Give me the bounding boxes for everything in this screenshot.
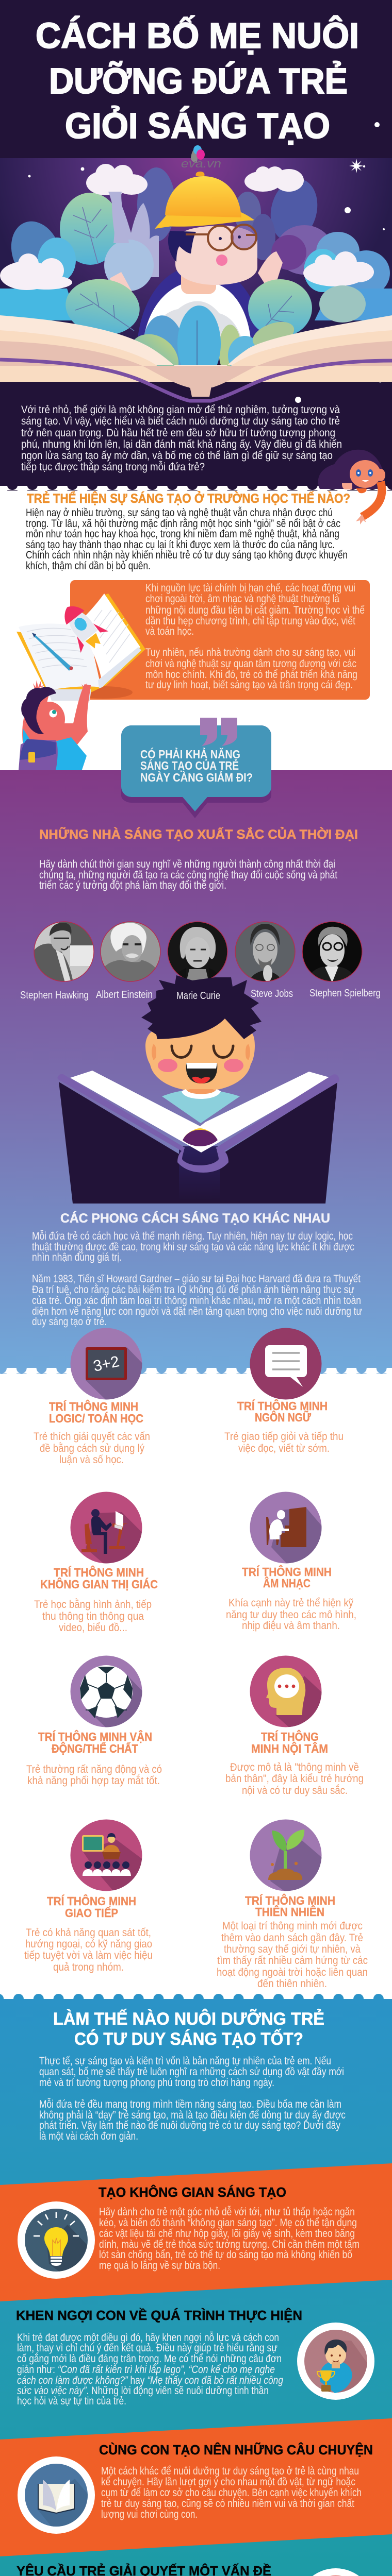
heading: make stories: CÙNG CON TẠO NÊN NHỮNG CÂU CHUYỆN — [99, 2442, 373, 2458]
panel: stories band — [0, 2418, 392, 2556]
portrait names — [20, 988, 381, 1002]
card: music intelligence — [226, 1565, 356, 1632]
card: music intelligence: ÂM NHẠC — [263, 1576, 311, 1590]
card: inner intelligence: bản thân", đây là kiểu trẻ hướng — [225, 1772, 364, 1785]
card: language intelligence: Trẻ giao tiếp giỏi và tiếp thu — [224, 1430, 344, 1443]
card: nature intelligence: thường say thế giới tự nhiên, và — [224, 1943, 361, 1955]
text block: school paragraph — [26, 507, 348, 572]
hands — [110, 251, 283, 312]
portrait names: Stephen Hawking — [20, 990, 89, 1001]
text block: creative styles — [32, 1230, 362, 1328]
logo: eva.vn — [181, 145, 221, 170]
card: inner intelligence: Được mô tả là "thông minh về — [230, 1761, 359, 1773]
heading: outstanding creators: NHỮNG NHÀ SÁNG TẠO XUẤT SẮC CỦA THỜI ĐẠI — [39, 826, 358, 842]
card: movement physical intelligence: TRÍ THÔNG MINH VẬN — [38, 1730, 152, 1743]
creative space text: mẹ quá lo lắng về sự bừa bộn. — [99, 2260, 220, 2272]
illustration: boy holding up book with rocket and pencil — [17, 594, 145, 771]
text block: introduction: ngọn lửa sáng tạo ấy mờ dần, và bố mẹ có thể làm gì để giữ sự sáng tạo — [21, 450, 333, 462]
text block: introduction: trở nên quan trọng. Dù hầu hết trẻ em đều sở hữu trí tưởng tượng phong — [21, 427, 335, 439]
title: CÁCH BỐ MẸ NUÔI — [36, 15, 359, 56]
text block: school paragraph: Hiện nay ở nhiều trường, sự sáng tạo và nghệ thuật vẫn chưa nhận được chú — [26, 507, 333, 519]
callout text: dần thu hẹp chương trình, chỉ tập trung vào đọc, viết — [145, 615, 355, 627]
card: communication intelligence: quả trong nhóm. — [53, 1961, 124, 1973]
text block: school paragraph: môn như toán học hay khoa học, trong khi niềm đam mê nghệ thuật, khả năng — [26, 528, 339, 540]
text block: introduction: tiếp tục được thắp sáng trong mỗi đứa trẻ? — [21, 461, 205, 473]
card: visual spatial intelligence — [34, 1565, 158, 1634]
shirt — [162, 1089, 240, 1123]
icon: child with trophy — [297, 2323, 377, 2402]
text block: how to nurture: mẻ và trí tưởng tượng phong phú trong trò chơi hàng ngày. — [39, 2077, 274, 2089]
card: communication intelligence: TRÍ THÔNG MINH — [47, 1894, 136, 1908]
portrait: Stephen Spielberg — [301, 921, 363, 982]
card: nature intelligence — [217, 1893, 368, 1990]
text block: school paragraph: khích, thậm chí dần bị bỏ quên. — [26, 560, 151, 572]
card: movement physical intelligence: ĐỘNG/THỂ CHẤT — [52, 1741, 138, 1755]
text block: praise the process: giản như: “Con đã rất kiên trì khi lắp lego”, “Con kể cho mẹ nghe — [17, 2364, 275, 2376]
question text: NGÀY CÀNG GIẢM ĐI? — [140, 770, 253, 784]
card: communication intelligence: tiếp tuyệt vời và làm việc hiệu — [24, 1949, 153, 1961]
panel: dark hero background — [0, 0, 392, 491]
clouds — [0, 164, 374, 290]
portrait: Marie Curie — [167, 921, 228, 982]
back leaves — [0, 167, 392, 320]
card: communication intelligence: Trẻ có khả năng quan sát tốt, — [26, 1926, 151, 1939]
stories text — [101, 2465, 362, 2520]
card: communication intelligence: hướng ngoại, có kỹ năng giao — [25, 1938, 152, 1950]
icon: teacher and audience — [70, 1820, 142, 1891]
text block: praise the process: học hỏi và sự tự tin của trẻ. — [17, 2395, 126, 2407]
text block: creators intro: chúng ta, những người đã tạo ra các công nghệ thay đổi cuộc sống và phát — [39, 869, 337, 881]
icon: football — [70, 1656, 142, 1727]
face — [145, 1018, 255, 1091]
text block: how to nurture — [39, 2055, 346, 2142]
text block: introduction: phú, nhưng khi lớn lên, lại dần đánh mất khả năng ấy. Vậy điều gì đã khiến — [21, 438, 342, 450]
text block: praise the process: sức vào việc này”. Những lời động viên sẽ nuôi dưỡng tinh thần — [17, 2385, 269, 2397]
card: visual spatial intelligence: Trẻ học bằng hình ảnh, tiếp — [34, 1598, 152, 1611]
text block: introduction: Với trẻ nhỏ, thế giới là một không gian mở để thử nghiệm, tưởng tượng và — [21, 404, 340, 416]
portrait names: Albert Einstein — [96, 989, 153, 1001]
card: inner intelligence — [225, 1730, 364, 1797]
illustration: boy reading book — [57, 975, 339, 1204]
title: GIỎI SÁNG TẠO — [65, 105, 330, 146]
callout text: chơi ngoài trời, âm nhạc và nghệ thuật thường là — [145, 593, 339, 605]
card: visual spatial intelligence: KHÔNG GIAN THỊ GIÁC — [40, 1577, 158, 1591]
stars — [28, 122, 385, 403]
card: inner intelligence: MINH NỘI TÂM — [251, 1741, 328, 1755]
question text — [140, 747, 253, 784]
card: visual spatial intelligence: video, biểu đồ... — [59, 1621, 127, 1634]
card: inner intelligence: TRÍ THÔNG — [261, 1730, 319, 1743]
card: music intelligence: Khía cạnh này trẻ thể hiện kỹ — [228, 1597, 353, 1609]
portrait: Albert Einstein — [100, 921, 161, 982]
pages — [70, 1071, 331, 1153]
card: music intelligence: TRÍ THÔNG MINH — [242, 1565, 332, 1579]
card: movement physical intelligence: Trẻ thường rất năng động và có — [26, 1763, 162, 1775]
card: logic maths intelligence: LOGIC/ TOÁN HỌC — [49, 1411, 143, 1425]
text block: how to nurture: là một vài cách đơn giản. — [39, 2130, 138, 2142]
card: logic maths intelligence: Trẻ thích giải quyết các vấn — [34, 1430, 150, 1443]
text block: praise the process: làm, thay vì chỉ chú ý đến kết quả. Điều này giúp trẻ hiểu rằng sự — [17, 2342, 277, 2354]
icon: document with pointing hand — [313, 2568, 359, 2576]
text block: school paragraph: sáng tạo hay thành thạo nhạc cụ lại ít khi được xem là thước đo của năng lực. — [26, 539, 335, 551]
text block: creators intro — [39, 858, 337, 891]
card: nature intelligence: TRÍ THÔNG MINH — [245, 1893, 335, 1907]
callout text: tư duy linh hoạt, biết sáng tạo và trân trọng cái đẹp. — [145, 679, 353, 691]
card: language intelligence: TRÍ THÔNG MINH — [237, 1399, 328, 1413]
portrait names: Stephen Spielberg — [309, 988, 381, 999]
portrait names: Marie Curie — [176, 990, 220, 1002]
card: visual spatial intelligence: thu thông tin thông qua — [42, 1610, 144, 1622]
title — [36, 15, 359, 146]
card: communication intelligence: GIAO TIẾP — [65, 1906, 118, 1920]
card: nature intelligence: THIÊN NHIÊN — [255, 1905, 324, 1919]
icon: person at piano — [250, 1492, 322, 1563]
portrait: Stephen Hawking — [33, 921, 96, 982]
stories text: lượng vui chơi cùng con. — [101, 2509, 198, 2520]
portrait names: Steve Jobs — [251, 988, 293, 999]
card: nature intelligence: tìm thấy rất nhiều cảm hứng từ các — [217, 1954, 368, 1967]
panel: purple gradient section — [0, 770, 392, 1374]
heading: how to nurture: CÓ TƯ DUY SÁNG TẠO TỐT? — [74, 2029, 303, 2049]
open book — [0, 315, 392, 401]
quote mark — [200, 718, 237, 746]
question text: SÁNG TẠO CỦA TRẺ — [140, 758, 239, 772]
heading: creative space: TẠO KHÔNG GIAN SÁNG TẠO — [99, 2184, 286, 2200]
card: language intelligence: NGÔN NGỮ — [255, 1410, 312, 1424]
panel: blue gradient section — [0, 1993, 392, 2576]
callout text: và toán học. — [145, 625, 194, 637]
text block: how to nurture: Thực tế, sự sáng tạo và kiên trì vốn là bản năng tự nhiên của trẻ em. Nếu — [39, 2055, 331, 2067]
heading: praise the process: KHEN NGỢI CON VỀ QUÁ TRÌNH THỰC HIỆN — [16, 2308, 302, 2323]
book cover — [59, 1082, 337, 1204]
text block: praise the process: cố gắng mới là điều đáng trân trọng. Mẹ có thể nói những câu đơn — [17, 2353, 282, 2365]
card: logic maths intelligence: đề bằng cách sử dụng lý — [40, 1442, 144, 1454]
icon: person at computer desk — [70, 1492, 142, 1563]
card: language intelligence: việc đọc, viết từ sớm. — [238, 1442, 330, 1454]
card: movement physical intelligence — [26, 1730, 162, 1787]
text block: praise the process — [17, 2332, 283, 2407]
callout text — [145, 582, 365, 691]
portrait: Steve Jobs — [234, 921, 296, 982]
heading: how to nurture: LÀM THẾ NÀO NUÔI DƯỠNG TRẺ — [53, 2009, 324, 2029]
text block: creative styles: duy sáng tạo ở trẻ. — [32, 1316, 107, 1328]
icon: open book — [18, 2456, 97, 2536]
callout: quote bubble question — [121, 718, 271, 818]
text block: praise the process: Khi trẻ đạt được một điều gì đó, hãy khen ngợi nỗ lực và cách con — [17, 2332, 279, 2344]
text block: creators intro: Hãy dành chút thời gian suy nghĩ về những người thành công nhất thời đại — [39, 858, 335, 870]
text block: introduction — [21, 404, 342, 473]
title: DƯỠNG ĐỨA TRẺ — [49, 61, 348, 101]
logo: eva.vn: eva.vn — [181, 157, 221, 170]
panel: orange callout — [70, 580, 370, 700]
creative space text — [99, 2206, 360, 2272]
text block: creators intro: triển các ý tưởng đột phá làm thay đổi thế giới. — [39, 879, 226, 891]
card: logic maths intelligence — [34, 1399, 150, 1466]
card: logic maths intelligence: TRÍ THÔNG MINH — [49, 1399, 138, 1413]
child body — [137, 206, 264, 355]
card: communication intelligence — [24, 1894, 153, 1973]
panel: creative space band — [0, 2163, 392, 2301]
card: movement physical intelligence: khả năng phối hợp tay mắt tốt. — [27, 1774, 160, 1787]
heading: how to nurture — [53, 2009, 324, 2049]
card: nature intelligence: đến thiên nhiên. — [257, 1977, 327, 1990]
card: visual spatial intelligence: TRÍ THÔNG MINH — [54, 1565, 144, 1579]
icon: head with thought bubble — [250, 1656, 322, 1727]
icon: light bulb — [18, 2201, 97, 2281]
heading: creativity at school: TRẺ THỂ HIỆN SỰ SÁNG TẠO Ở TRƯỜNG HỌC THẾ NÀO? — [27, 490, 350, 506]
card: music intelligence: nhịp điệu và âm thanh. — [242, 1619, 340, 1632]
question text: CÓ PHẢI KHẢ NĂNG — [140, 747, 240, 761]
card: nature intelligence: thêm vào danh sách gần đây. Trẻ — [221, 1931, 363, 1944]
hair — [141, 975, 262, 1039]
illustration: girl peeking over edge — [318, 450, 385, 524]
text block: praise the process: cách con làm được không?” hay “Mẹ thấy con đã bỏ rất nhiều công — [17, 2375, 283, 2386]
icon: chalkboard: 3+2 — [92, 1353, 121, 1375]
card: inner intelligence: nội và có tư duy sâu sắc. — [242, 1784, 348, 1797]
icon: speech bubble — [250, 1328, 322, 1399]
hat — [155, 172, 254, 229]
illustration: hero child in book with leaves — [0, 164, 392, 401]
card: logic maths intelligence: luận và số học. — [59, 1453, 124, 1466]
heading: creative styles: CÁC PHONG CÁCH SÁNG TẠO KHÁC NHAU — [60, 1211, 330, 1226]
icon: chalkboard — [70, 1328, 142, 1399]
front leaves — [62, 275, 366, 392]
card: language intelligence — [224, 1399, 344, 1454]
text block: creative styles: nhìn nhận đúng giá trị. — [32, 1251, 122, 1263]
card: nature intelligence: hoạt động ngoài trời hoặc liên quan — [217, 1966, 368, 1978]
text block: introduction: sáng tạo. Vì vậy, việc hiểu và biết cách nuôi dưỡng tư duy sáng tạo cho trẻ — [21, 415, 340, 427]
icon: sprout — [250, 1820, 322, 1891]
card: nature intelligence: Một loại trí thông minh mới được — [222, 1920, 363, 1932]
card: music intelligence: năng tư duy theo các mô hình, — [226, 1608, 356, 1621]
